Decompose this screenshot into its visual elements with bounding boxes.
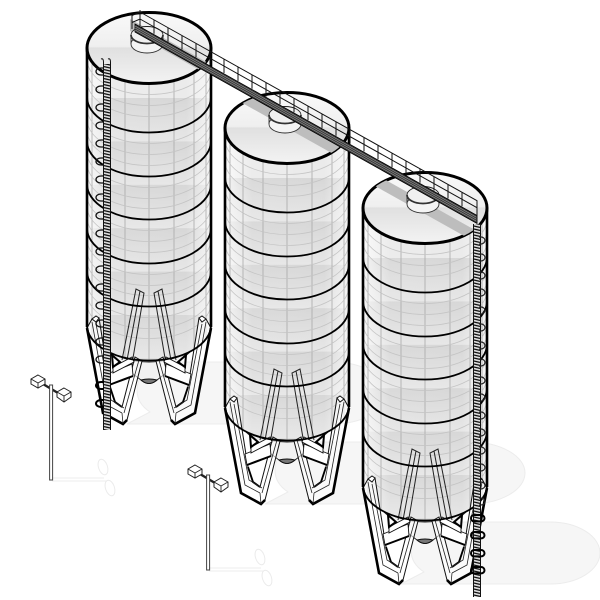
ground shadows — [127, 362, 600, 584]
silo 3 — [360, 166, 490, 584]
safety loops: lower — [96, 382, 104, 407]
walkway railing — [132, 10, 477, 223]
ladder: silo 1 — [96, 59, 110, 430]
silo 2 — [225, 81, 350, 504]
ladder: silo 3 — [471, 224, 485, 597]
safety loops: upper — [96, 68, 104, 363]
shadow: silo 1 — [127, 362, 387, 424]
safety loops: lower — [471, 515, 484, 573]
safety loops: upper — [479, 237, 485, 505]
walkway connecting silos — [132, 10, 477, 224]
silo 1 — [87, 12, 220, 424]
walkway deck — [135, 24, 477, 224]
lamp post 1 — [31, 375, 117, 497]
shadow: silo 3 — [401, 522, 600, 584]
shadow: silo 2 — [265, 442, 525, 504]
lamp post 2 — [188, 465, 274, 587]
